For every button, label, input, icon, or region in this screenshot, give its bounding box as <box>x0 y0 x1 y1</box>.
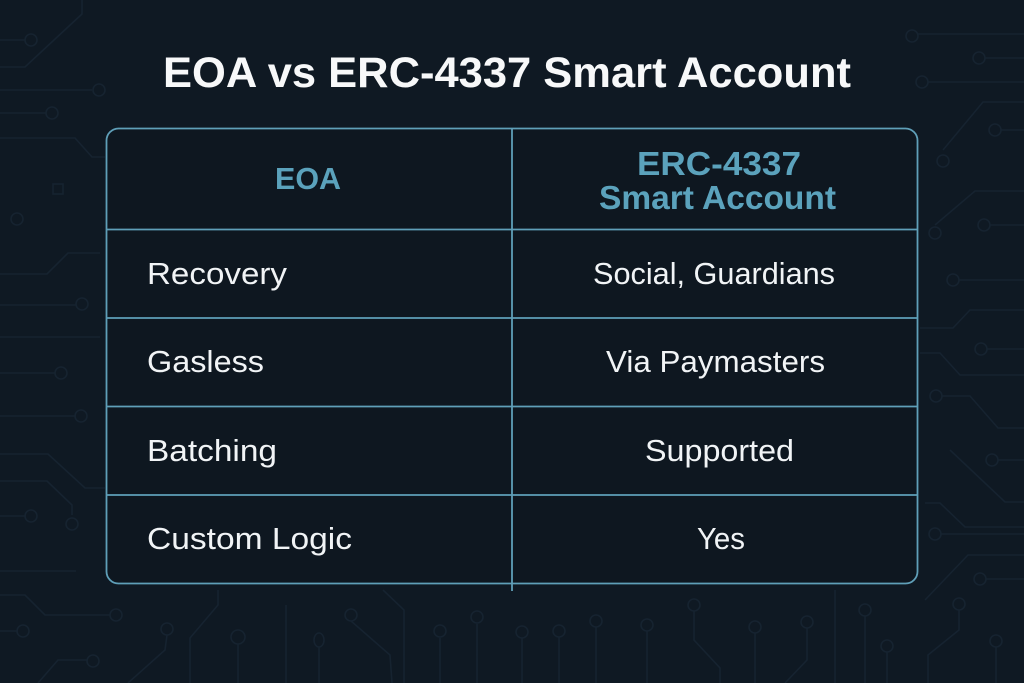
row: Batching: Supported <box>645 433 794 468</box>
row: Batching <box>147 433 794 468</box>
header: ERC-4337 Smart Account: Smart Account <box>599 179 836 216</box>
row: Recovery: Social, Guardians <box>593 256 835 291</box>
header: EOA: EOA <box>275 162 341 196</box>
row: Custom Logic <box>147 521 745 556</box>
row: Custom Logic: Custom Logic <box>147 521 352 556</box>
header: ERC-4337 Smart Account: ERC-4337 <box>637 145 801 182</box>
row: Recovery: Recovery <box>147 256 288 291</box>
row: Batching: Batching <box>147 433 277 468</box>
row: Gasless: Via Paymasters <box>606 344 825 379</box>
row: Recovery <box>147 256 835 291</box>
title: EOA vs ERC-4337 Smart Account <box>163 49 851 97</box>
row: Gasless: Gasless <box>147 344 264 379</box>
row: Gasless <box>147 344 825 379</box>
header: ERC-4337 Smart Account <box>599 145 836 216</box>
comparison table <box>106 128 918 591</box>
row: Custom Logic: Yes <box>697 521 745 556</box>
